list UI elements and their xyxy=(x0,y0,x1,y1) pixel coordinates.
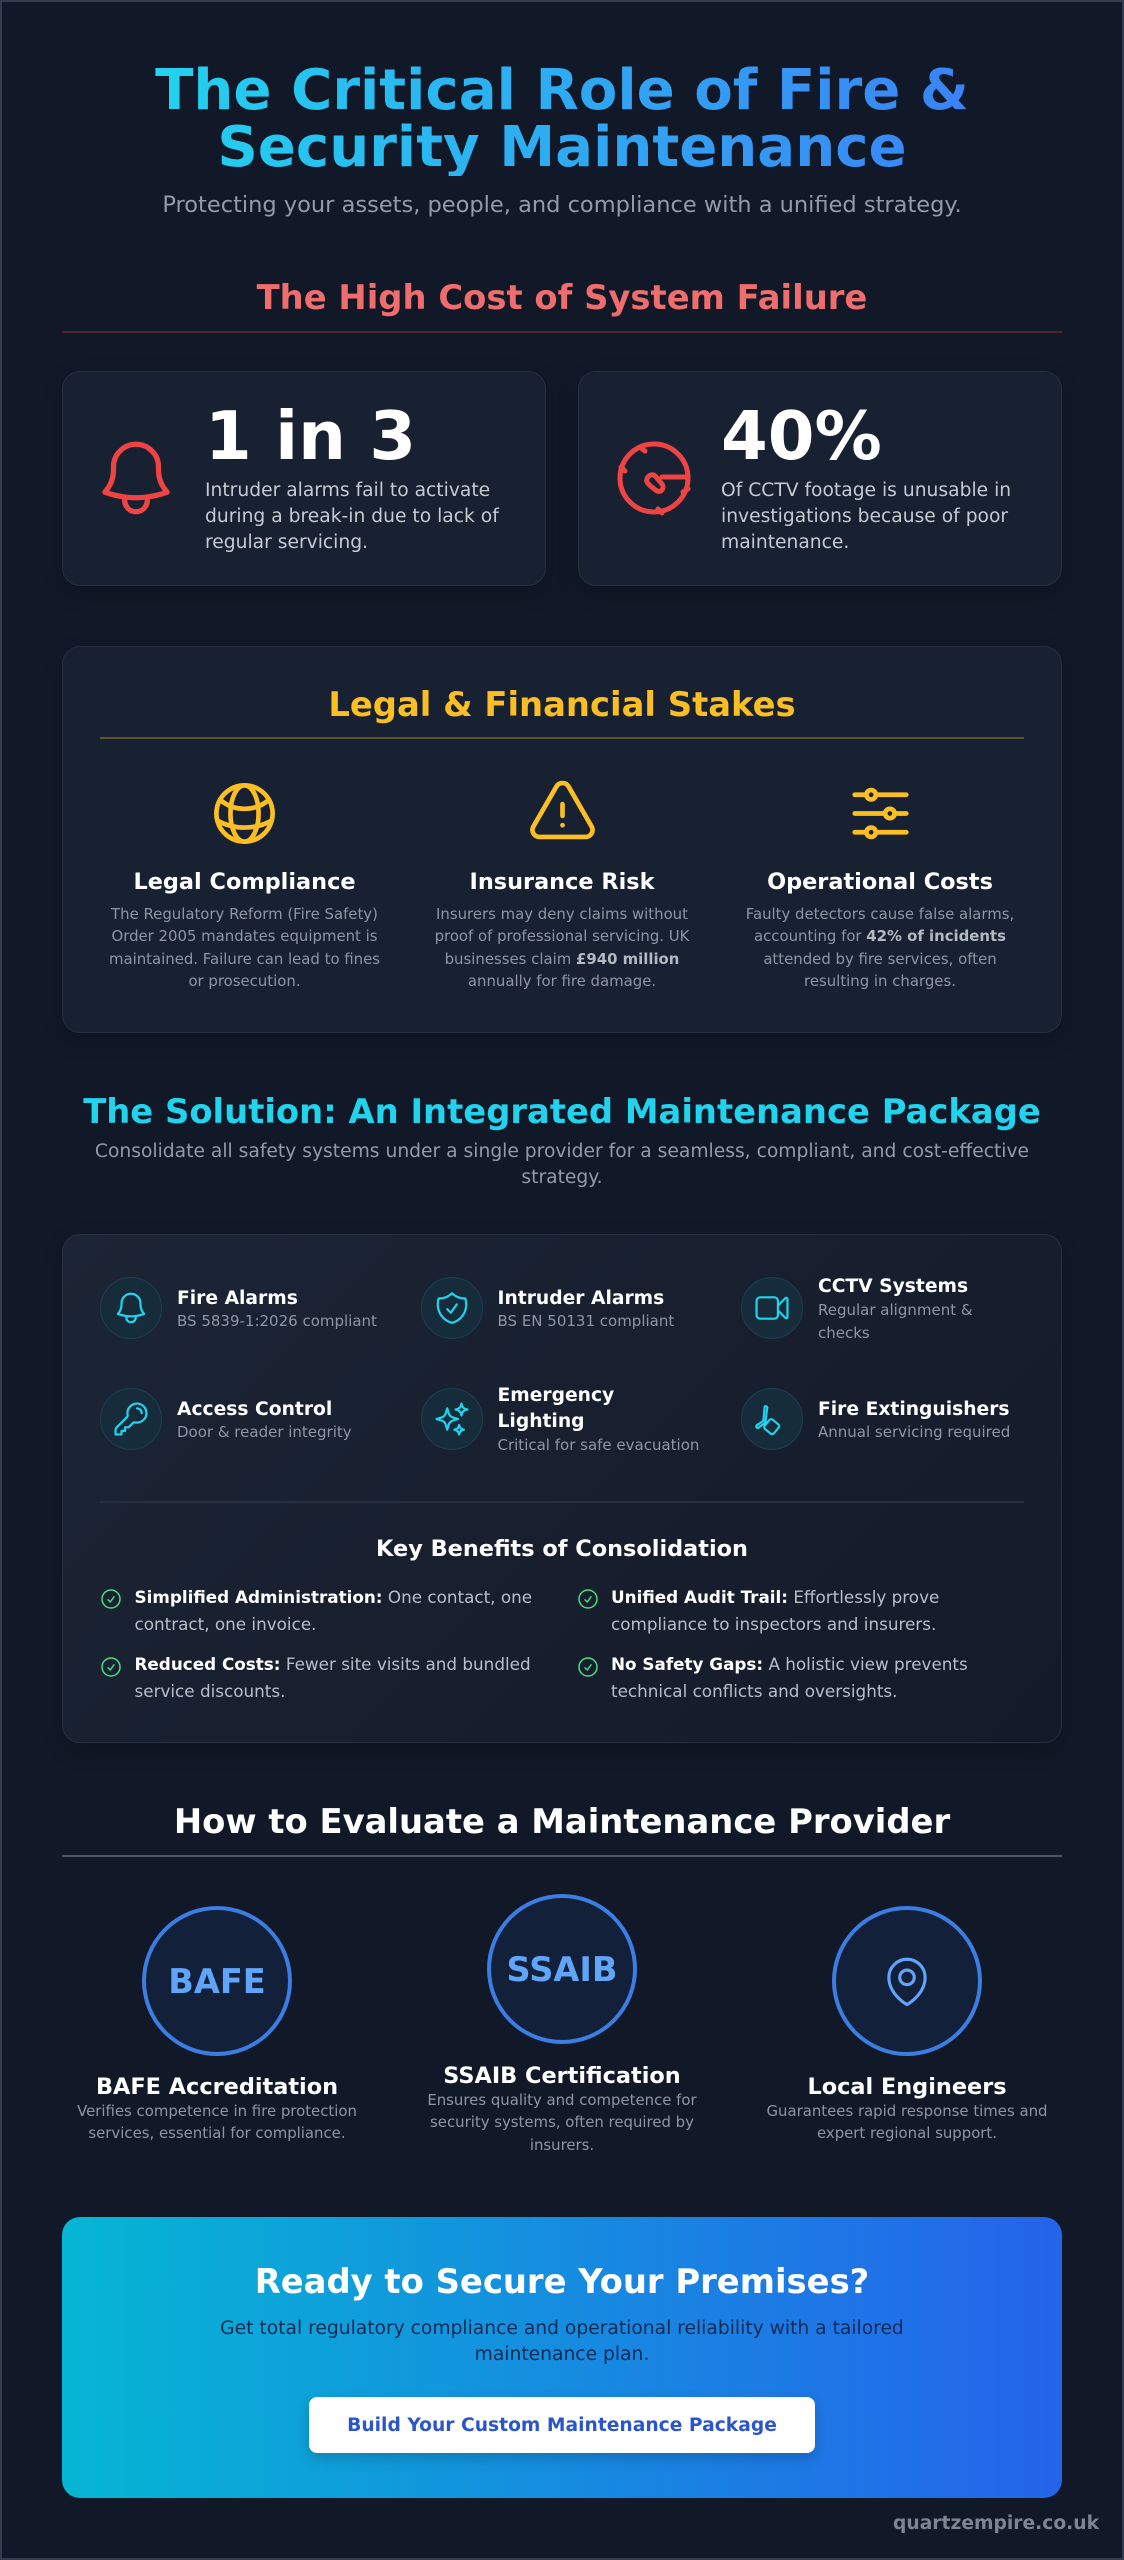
icon: access key xyxy=(100,1388,162,1450)
statistic description: regular servicing. xyxy=(205,532,368,553)
icon: emergency lighting sparkles xyxy=(420,1388,482,1450)
text: legal compliance: or prosecution. xyxy=(188,972,301,990)
icon: check xyxy=(578,1657,598,1677)
heading: how to evaluate: How to Evaluate a Maintenance Provider xyxy=(174,1802,950,1841)
sublabel: cctv systems: Regular alignment & xyxy=(818,1301,973,1319)
label: emergency lighting: Emergency xyxy=(498,1385,614,1406)
panel: alarm statistic xyxy=(62,371,546,586)
text: solution intro: strategy. xyxy=(521,1167,603,1188)
statistic description: Intruder alarms fail to activate xyxy=(205,480,490,500)
text: legal compliance: The Regulatory Reform (Fire Safety) xyxy=(111,905,378,923)
statistic description: investigations because of poor xyxy=(721,506,1008,527)
button: build package xyxy=(309,2397,815,2453)
text: SSAIB certification: Ensures quality and competence for xyxy=(427,2091,697,2109)
text: insurance risk: annually for fire damage. xyxy=(468,972,656,990)
sublabel: access control: Door & reader integrity xyxy=(177,1423,352,1441)
panel: legal and financial stakes xyxy=(62,646,1062,1033)
statistic: 40%: 40% xyxy=(721,397,882,475)
panel: call to action xyxy=(62,2217,1062,2498)
icon: check xyxy=(101,1657,121,1677)
statistic description: maintenance. xyxy=(721,532,849,553)
text: insurance risk xyxy=(435,905,690,990)
benefit: unified audit trail: compliance to inspectors and insurers. xyxy=(611,1614,936,1634)
badge: BAFE xyxy=(142,1906,292,2056)
benefit: no safety gaps: No Safety Gaps: A holistic view prevents xyxy=(611,1654,968,1674)
badge: SSAIB: SSAIB xyxy=(507,1950,617,1988)
sublabel: intruder alarms: BS EN 50131 compliant xyxy=(498,1312,674,1330)
heading: SSAIB certification: SSAIB Certification xyxy=(443,2062,681,2088)
icon: bell xyxy=(102,442,170,514)
title xyxy=(142,63,982,176)
sublabel: fire alarms: BS 5839-1:2026 compliant xyxy=(177,1312,377,1330)
text: BAFE accreditation: services, essential for compliance. xyxy=(88,2124,346,2142)
benefit: reduced costs: service discounts. xyxy=(134,1681,285,1701)
icon: cctv lens xyxy=(618,442,690,516)
heading: key benefits: Key Benefits of Consolidation xyxy=(376,1536,748,1562)
badge: location pin xyxy=(832,1906,982,2056)
sublabel: cctv systems xyxy=(818,1301,973,1342)
icon: warning triangle xyxy=(530,780,595,840)
badge: BAFE: BAFE xyxy=(168,1962,266,2000)
label: intruder alarms: Intruder Alarms xyxy=(498,1288,664,1308)
panel: cctv statistic xyxy=(578,371,1062,586)
text: operational costs xyxy=(746,905,1014,990)
text: operational costs: attended by fire services, often xyxy=(763,950,997,968)
title: The Critical Role of Fire & xyxy=(155,58,969,123)
watermark: quartzempire.co.uk xyxy=(893,2512,1099,2534)
text: solution intro: Consolidate all safety systems under a single provider for a seamless, compliant, and cost-effective xyxy=(95,1140,1029,1162)
text: local engineers xyxy=(766,2102,1047,2142)
text: operational costs: Faulty detectors cause false alarms, xyxy=(746,905,1014,923)
text: operational costs: resulting in charges. xyxy=(804,972,956,990)
title: Security Maintenance xyxy=(217,115,907,180)
text: insurance risk: Insurers may deny claims without xyxy=(436,905,688,923)
heading: high cost of system failure: The High Cost of System Failure xyxy=(257,278,867,317)
text: local engineers: expert regional support. xyxy=(817,2124,997,2142)
heading: insurance risk: Insurance Risk xyxy=(469,868,655,894)
icon: sliders xyxy=(852,788,909,840)
icon: fire extinguisher xyxy=(741,1388,803,1450)
heading: the solution: The Solution: An Integrated Maintenance Package xyxy=(83,1092,1041,1131)
text: call to action: Get total regulatory compliance and operational reliability with a tailored xyxy=(220,2318,904,2338)
sublabel: fire extinguishers: Annual servicing required xyxy=(818,1423,1010,1441)
icon: fire alarm bell xyxy=(100,1277,162,1339)
text: BAFE accreditation xyxy=(77,2102,357,2142)
icon: check xyxy=(578,1589,598,1609)
benefit: no safety gaps: technical conflicts and oversights. xyxy=(611,1681,898,1701)
statistic description: Of CCTV footage is unusable in xyxy=(721,480,1011,500)
text: SSAIB certification: insurers. xyxy=(530,2136,594,2154)
text: call to action: maintenance plan. xyxy=(475,2344,649,2365)
label: fire alarms: Fire Alarms xyxy=(177,1288,298,1308)
label: cctv systems: CCTV Systems xyxy=(818,1276,968,1297)
benefit: unified audit trail xyxy=(611,1587,939,1634)
label: access control: Access Control xyxy=(177,1398,332,1420)
text: insurance risk: businesses claim £940 million xyxy=(445,950,679,968)
statistic description xyxy=(721,480,1011,553)
text: SSAIB certification xyxy=(427,2091,697,2154)
icon: intruder shield xyxy=(420,1277,482,1339)
heading: BAFE accreditation: BAFE Accreditation xyxy=(96,2074,338,2100)
badge: SSAIB xyxy=(487,1894,637,2044)
button: build package: Build Your Custom Maintenance Package xyxy=(347,2415,777,2436)
heading rule: high cost xyxy=(62,331,1062,333)
icon: globe xyxy=(214,783,275,844)
panel: integrated package xyxy=(62,1234,1062,1743)
text: legal compliance: Order 2005 mandates equipment is xyxy=(111,927,378,945)
sublabel: emergency lighting: Critical for safe evacuation xyxy=(498,1436,699,1454)
icon: cctv camera xyxy=(741,1277,803,1339)
text: BAFE accreditation: Verifies competence in fire protection xyxy=(77,2102,357,2120)
text: insurance risk: proof of professional servicing. UK xyxy=(435,927,689,945)
benefit: simplified administration: contract, one invoice. xyxy=(134,1614,316,1634)
heading rule: evaluate xyxy=(62,1855,1062,1857)
heading rule: legal xyxy=(100,737,1024,739)
text: call to action xyxy=(220,2318,904,2365)
statistic: 1 in 3: 1 in 3 xyxy=(205,397,416,475)
statistic description: during a break-in due to lack of xyxy=(205,506,499,527)
text: solution intro xyxy=(95,1140,1029,1188)
benefit: reduced costs: Reduced Costs: Fewer site visits and bundled xyxy=(134,1654,531,1674)
text: legal compliance: maintained. Failure can lead to fines xyxy=(109,950,380,968)
benefit: simplified administration xyxy=(134,1587,532,1634)
text: legal compliance xyxy=(109,905,380,990)
label: fire extinguishers: Fire Extinguishers xyxy=(818,1398,1010,1420)
subtitle: Protecting your assets, people, and compliance with a unified strategy. xyxy=(162,192,962,218)
label: emergency lighting xyxy=(498,1385,614,1432)
benefit: unified audit trail: Unified Audit Trail: Effortlessly prove xyxy=(611,1587,939,1607)
heading: operational costs: Operational Costs xyxy=(767,868,993,894)
text: SSAIB certification: security systems, often required by xyxy=(430,2113,694,2131)
heading: legal and financial stakes: Legal & Financial Stakes xyxy=(328,685,796,724)
benefit: simplified administration: Simplified Administration: One contact, one xyxy=(134,1587,532,1607)
heading: call to action: Ready to Secure Your Premises? xyxy=(255,2262,869,2300)
sublabel: cctv systems: checks xyxy=(818,1324,870,1342)
label: emergency lighting: Lighting xyxy=(498,1411,585,1432)
statistic description xyxy=(205,480,500,553)
benefit: no safety gaps xyxy=(611,1654,968,1701)
benefit: reduced costs xyxy=(134,1654,531,1701)
heading: local engineers: Local Engineers xyxy=(807,2074,1007,2100)
text: local engineers: Guarantees rapid response times and xyxy=(766,2102,1047,2120)
heading: legal compliance: Legal Compliance xyxy=(133,868,356,894)
text: operational costs: accounting for 42% of incidents xyxy=(754,927,1006,945)
icon: check xyxy=(101,1589,121,1609)
